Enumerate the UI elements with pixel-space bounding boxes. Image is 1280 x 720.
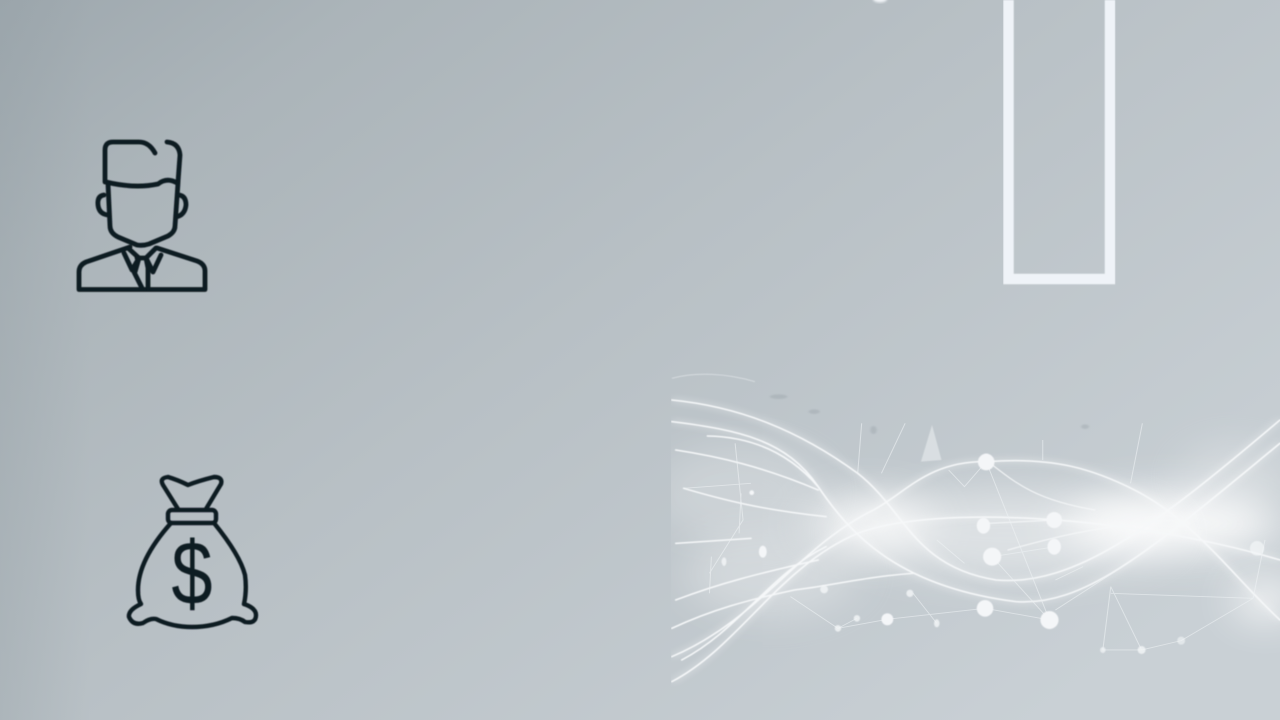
dollar sign: $ — [171, 523, 213, 624]
grey specks — [770, 394, 1089, 434]
white tick at top edge — [873, 0, 887, 2]
icon: money bag — [129, 477, 256, 627]
glow — [652, 443, 1280, 623]
mesh lines — [684, 423, 1265, 650]
white outlined rectangle — [1008, 0, 1110, 279]
spike — [921, 425, 942, 462]
wave strands — [672, 400, 1280, 682]
network light wave — [652, 374, 1280, 682]
network nodes — [722, 454, 1264, 654]
icon: businessman — [79, 142, 205, 290]
wave strands, soft — [678, 399, 1058, 674]
faint arc — [672, 374, 755, 382]
